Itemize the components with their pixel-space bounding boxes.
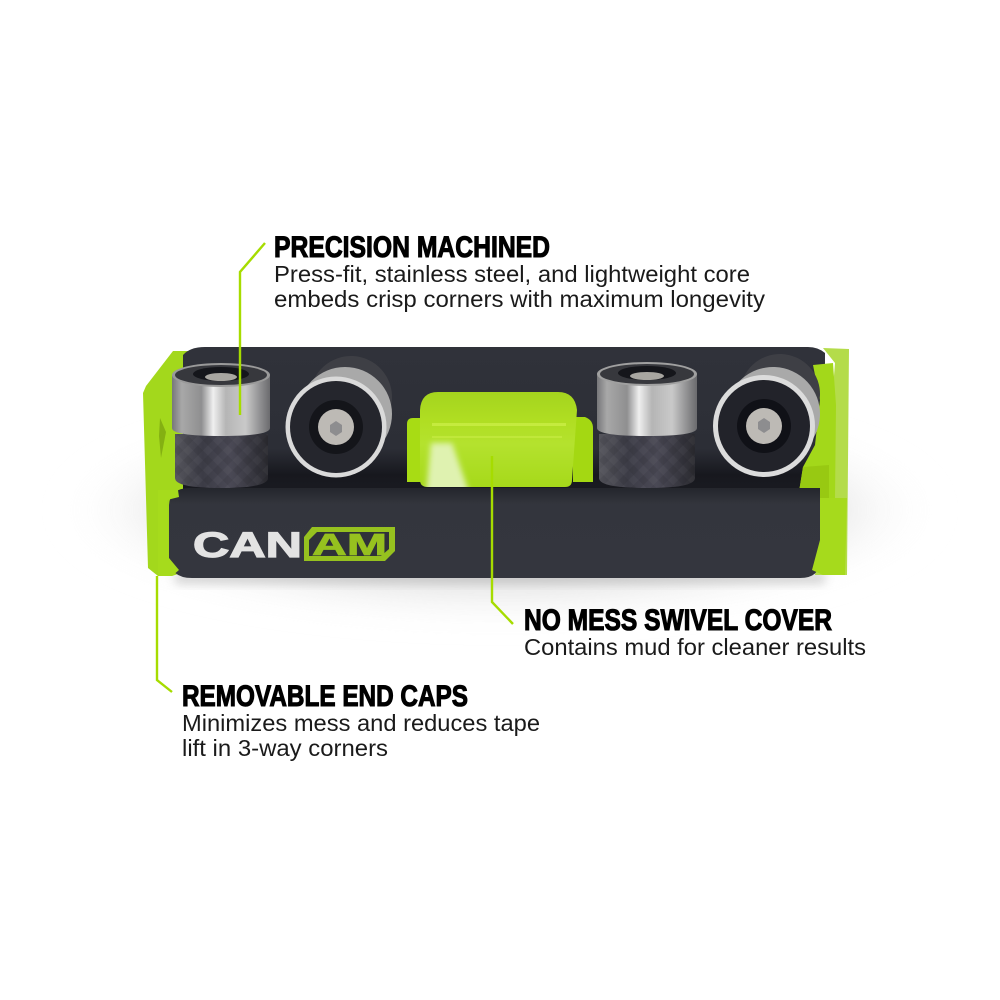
roller 1: upright bbox=[172, 363, 270, 488]
logo: CAN AM: AM bbox=[312, 527, 387, 562]
description: lift in 3-way corners bbox=[182, 735, 388, 761]
end cap tabs over bar bbox=[158, 418, 847, 576]
product: corner roller bbox=[143, 347, 849, 578]
callout: no mess swivel cover bbox=[492, 456, 866, 660]
callout: precision machined bbox=[240, 231, 766, 415]
left end cap bbox=[143, 351, 194, 576]
roller 4: face on bbox=[713, 375, 815, 477]
leader line bbox=[157, 576, 172, 692]
logo: CAN AM: CAN bbox=[193, 526, 302, 565]
logo: CAN AM bbox=[193, 526, 395, 565]
description: Contains mud for cleaner results bbox=[524, 634, 866, 660]
swivel cover bbox=[407, 392, 593, 495]
description: embeds crisp corners with maximum longevity bbox=[274, 286, 766, 312]
leader line bbox=[240, 243, 265, 415]
heading: REMOVABLE END CAPS bbox=[182, 680, 468, 713]
soft background shadow bbox=[60, 405, 940, 615]
roller 3: upright bbox=[597, 362, 697, 488]
roller 2: face on bbox=[286, 376, 386, 478]
heading: NO MESS SWIVEL COVER bbox=[524, 604, 832, 637]
back plate bbox=[183, 347, 825, 492]
description: Press-fit, stainless steel, and lightweight core bbox=[274, 261, 750, 287]
right end cap bbox=[798, 348, 849, 575]
heading: PRECISION MACHINED bbox=[274, 231, 550, 264]
description: Minimizes mess and reduces tape bbox=[182, 710, 540, 736]
callout: removable end caps bbox=[157, 576, 540, 761]
front bar bbox=[169, 488, 820, 578]
leader line bbox=[492, 456, 513, 624]
